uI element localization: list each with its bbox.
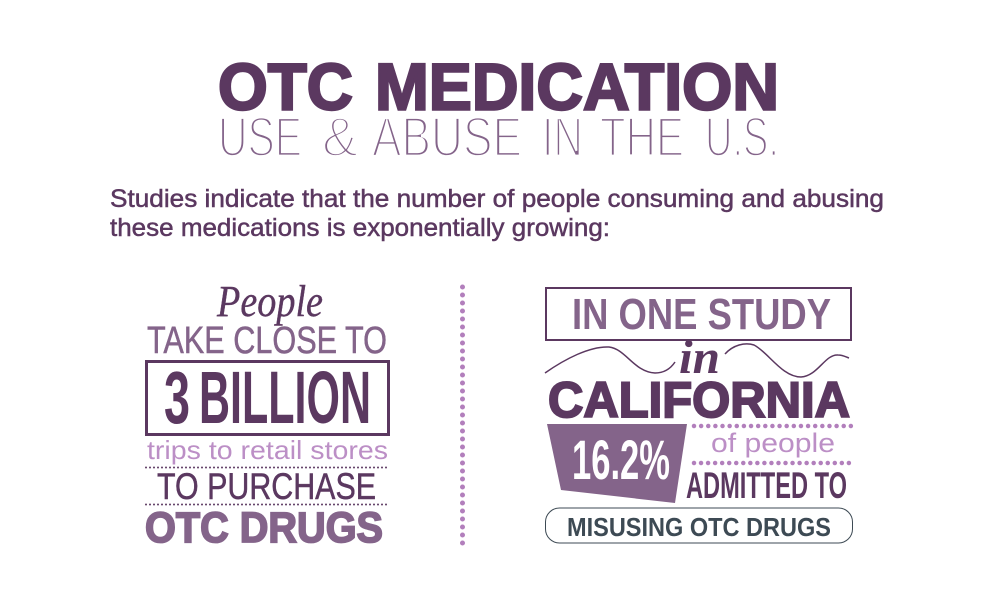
box: 3 billion: 3	[164, 356, 190, 439]
dotted rule	[146, 504, 388, 506]
dotted rule	[146, 466, 388, 468]
badge: 16.2%	[547, 424, 687, 503]
script word: in: in	[679, 331, 720, 384]
text: california: CALIFORNIA	[548, 372, 850, 428]
title: OTC	[218, 50, 353, 124]
text: trips to retail stores: trips to retail stores	[147, 435, 388, 465]
intro text	[110, 185, 884, 242]
box: in one study: IN ONE STUDY	[572, 290, 831, 339]
title: USE	[218, 105, 302, 168]
box: 3 billion	[146, 356, 388, 439]
intro text: these medications is exponentially growing:	[110, 214, 610, 242]
panel: 3 billion trips	[145, 277, 388, 552]
dotted rule	[694, 461, 849, 465]
text: of people: of people	[711, 428, 835, 458]
title	[218, 50, 779, 168]
intro text: Studies indicate that the number of people consuming and abusing	[110, 185, 884, 213]
title: ABUSE	[372, 105, 522, 168]
box: 3 billion: BILLION	[199, 356, 371, 439]
text: to purchase: TO PURCHASE	[157, 466, 376, 507]
divider dots	[460, 287, 465, 545]
title: MEDICATION	[375, 50, 779, 124]
title: THE	[600, 105, 684, 168]
text: take close to: TAKE CLOSE TO	[147, 320, 387, 362]
pill: misusing otc drugs: MISUSING OTC DRUGS	[567, 512, 831, 542]
decorative swash left	[545, 347, 675, 373]
decorative swash right	[725, 344, 849, 377]
panel: california study	[545, 288, 852, 543]
title: &	[322, 105, 358, 168]
script word: People: People	[216, 277, 323, 326]
text: admitted to: ADMITTED TO	[686, 465, 847, 506]
badge: 16.2%: 16.2%	[572, 428, 670, 491]
text: otc drugs: OTC DRUGS	[145, 504, 383, 552]
title: U.S.	[705, 105, 779, 168]
title: IN	[542, 105, 583, 168]
dotted rule	[694, 424, 851, 428]
